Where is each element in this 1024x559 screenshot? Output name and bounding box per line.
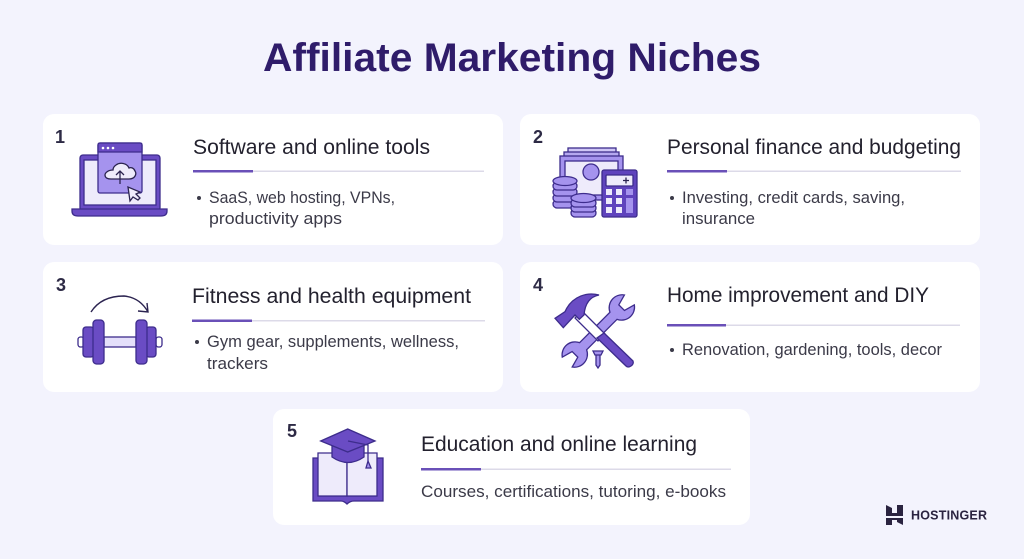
title: Affiliate Marketing Niches (263, 36, 761, 80)
bullet list: productivity apps (209, 210, 342, 228)
number 3: 3 (56, 275, 66, 295)
number 2: 2 (533, 127, 543, 147)
heading: Home improvement and DIY (667, 284, 929, 307)
icon: hammer, wrench and screw (555, 291, 638, 371)
bullet list: Renovation, gardening, tools, decor (682, 341, 942, 359)
bullet list: Investing, credit cards, saving, (682, 189, 905, 207)
icon: money, coins and calculator (553, 148, 637, 217)
heading: Education and online learning (421, 433, 697, 456)
number 5: 5 (287, 421, 297, 441)
icon: book and graduation cap (313, 429, 383, 504)
bullet list: trackers (207, 355, 268, 373)
number 4: 4 (533, 275, 543, 295)
panel: education and online learning (273, 409, 750, 525)
bullet list (197, 189, 395, 228)
panel: personal finance and budgeting (520, 114, 980, 245)
heading: Software and online tools (193, 136, 430, 159)
heading: Fitness and health equipment (192, 285, 471, 308)
number 1: 1 (55, 127, 65, 147)
icon: laptop with cloud upload window (72, 143, 167, 216)
bullet list: insurance (682, 210, 755, 228)
bullet list: Gym gear, supplements, wellness, (207, 333, 459, 351)
heading: Personal finance and budgeting (667, 136, 961, 159)
icon: dumbbell with arc arrow (78, 296, 162, 364)
logo: Hostinger (886, 505, 987, 525)
bullet list (195, 333, 459, 373)
bullet list (670, 189, 905, 228)
body text: Courses, certifications, tutoring, e-books (421, 483, 726, 501)
logo: Hostinger: HOSTINGER (911, 508, 987, 522)
panel: software and online tools (43, 114, 503, 245)
bullet list: SaaS, web hosting, VPNs, (209, 189, 395, 207)
panel: home improvement and DIY (520, 262, 980, 392)
panel: fitness and health equipment (43, 262, 503, 392)
